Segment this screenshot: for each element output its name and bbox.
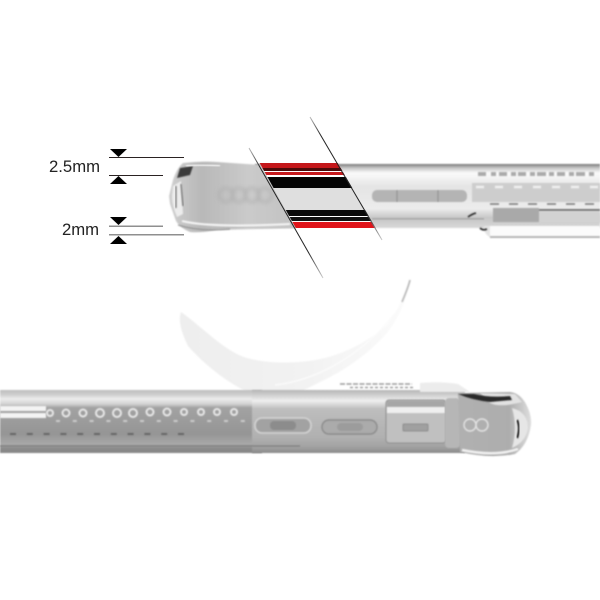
phone bottom: main body right: [252, 390, 465, 453]
phone bottom: top ledge perforations: [340, 382, 470, 392]
phone: bottom view with case: [0, 382, 531, 456]
phone bottom: volume button 1: [255, 418, 311, 433]
feather: [180, 280, 410, 392]
phone bottom: white perforations: [0, 406, 46, 418]
measurement: 2.5mm: [49, 149, 184, 184]
phone bottom: collar: [445, 398, 460, 448]
phone bottom: mute switch panel: [386, 400, 446, 443]
phone bottom: grip dot rows: [0, 408, 300, 446]
cross-section cutaway: [260, 163, 376, 229]
phone top: grey switch block: [468, 208, 600, 230]
phone top: main body: [255, 164, 600, 228]
measurement: 2mm: [62, 217, 184, 244]
phone top: side detail band: [372, 218, 484, 220]
phone top: textured grip band: [472, 183, 600, 204]
phone: top view with case: [169, 158, 600, 238]
cut line right: [310, 117, 382, 240]
phone bottom: volume button 2: [322, 420, 377, 434]
phone top: lower module: [484, 226, 600, 238]
phone top: case corner: [169, 162, 300, 232]
measurement: 2mm: 2mm: [62, 220, 99, 239]
cut line left: [249, 148, 323, 278]
phone bottom: case corner: [458, 392, 531, 456]
measurement: 2.5mm: 2.5mm: [49, 157, 100, 176]
phone bottom: main body left: [0, 390, 262, 453]
phone top: button pill: [372, 190, 467, 202]
phone top: square perforations: [478, 172, 594, 176]
